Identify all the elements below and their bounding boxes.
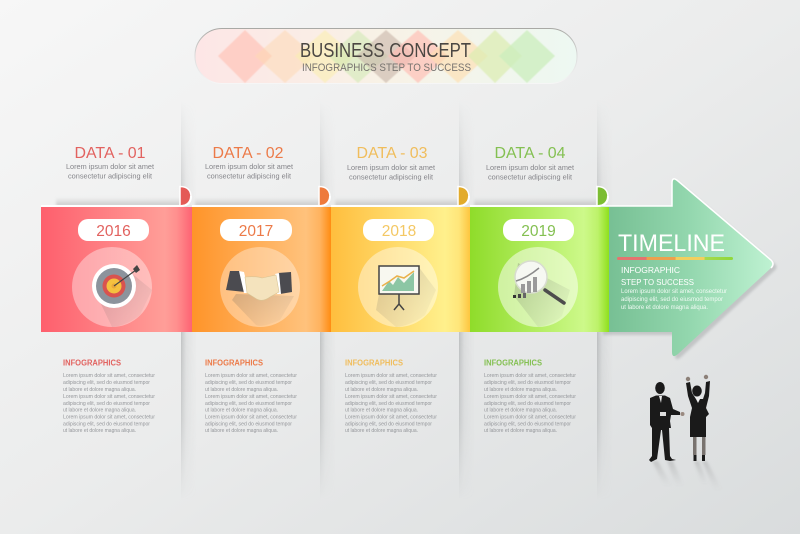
text block: infographics 4: Lorem ipsum dolor sit amet, consectetur [484, 414, 576, 420]
banner diamonds [218, 30, 555, 83]
text block: infographics 2 [205, 358, 297, 434]
business people silhouettes [649, 375, 722, 490]
text block: infographics 4: INFOGRAPHICS [484, 358, 543, 368]
year pill [78, 219, 149, 241]
text block: infographics 1: Lorem ipsum dolor sit amet, consectetur [63, 373, 155, 379]
icon: handshake [220, 247, 300, 327]
column heading: data 01: DATA - 01 [74, 145, 146, 162]
column heading: data 02: DATA - 02 [212, 145, 284, 162]
column heading: data 02: Lorem ipsum dolor sit amet [205, 162, 293, 171]
text block: infographics 3: ut labore et dolore magna aliqua. [345, 428, 418, 434]
text block: infographics 1: adipiscing elit, sed do eiusmod tempor [63, 401, 150, 407]
arrow: timeline [600, 179, 776, 359]
text block: infographics 4: ut labore et dolore magna aliqua. [484, 428, 557, 434]
column heading: data 04: DATA - 04 [494, 145, 566, 162]
text block: infographics 3: adipiscing elit, sed do eiusmod tempor [345, 422, 432, 428]
icon: target [72, 247, 152, 327]
text block: infographics 3: Lorem ipsum dolor sit amet, consectetur [345, 394, 437, 400]
text block: infographics 1: adipiscing elit, sed do eiusmod tempor [63, 380, 150, 386]
text block: infographics 3: adipiscing elit, sed do eiusmod tempor [345, 380, 432, 386]
year pill [220, 219, 292, 241]
text block: infographics 4: ut labore et dolore magna aliqua. [484, 408, 557, 414]
arrow title: TIMELINE [618, 230, 725, 257]
text block: infographics 4: Lorem ipsum dolor sit amet, consectetur [484, 394, 576, 400]
arrow body text: ut labore et dolore magna aliqua. [621, 304, 708, 311]
arrow body text [621, 288, 727, 311]
text block: infographics 3: ut labore et dolore magna aliqua. [345, 408, 418, 414]
banner subtitle: INFOGRAPHICS STEP TO SUCCESS [302, 62, 471, 74]
band 1: 2016 [41, 186, 192, 332]
text block: infographics 2: adipiscing elit, sed do eiusmod tempor [205, 401, 292, 407]
column heading: data 04: consectetur adipiscing elit [488, 172, 572, 182]
text block: infographics 1: INFOGRAPHICS [63, 358, 122, 368]
band 3: 2018: 2018 [382, 223, 416, 240]
rainbow rule [617, 257, 733, 260]
column heading: data 01: consectetur adipiscing elit [68, 172, 152, 180]
text block: infographics 4: adipiscing elit, sed do eiusmod tempor [484, 380, 571, 386]
floor reflections [652, 461, 722, 490]
text block: infographics 2: ut labore et dolore magna aliqua. [205, 428, 278, 434]
column heading: data 03: Lorem ipsum dolor sit amet [347, 163, 435, 172]
businesswoman [686, 375, 710, 461]
column heading: data 04 [486, 145, 574, 182]
year pill [363, 219, 434, 241]
text block: infographics 3: Lorem ipsum dolor sit amet, consectetur [345, 414, 437, 420]
column heading: data 02 [205, 145, 293, 180]
text block: infographics 2: adipiscing elit, sed do eiusmod tempor [205, 380, 292, 386]
text block: infographics 2: Lorem ipsum dolor sit amet, consectetur [205, 394, 297, 400]
band 1: 2016: 2016 [96, 223, 131, 240]
column heading: data 03: consectetur adipiscing elit [349, 172, 433, 182]
text block: infographics 1 [63, 358, 155, 434]
text block: infographics 3 [345, 358, 437, 434]
text block: infographics 1: Lorem ipsum dolor sit amet, consectetur [63, 394, 155, 400]
column heading: data 01: Lorem ipsum dolor sit amet [66, 162, 154, 171]
column heading: data 04: Lorem ipsum dolor sit amet [486, 163, 574, 172]
text block: infographics 2: Lorem ipsum dolor sit amet, consectetur [205, 414, 297, 420]
text block: infographics 1: ut labore et dolore magna aliqua. [63, 408, 136, 414]
text block: infographics 2: adipiscing elit, sed do eiusmod tempor [205, 422, 292, 428]
column heading: data 03: DATA - 03 [356, 145, 428, 162]
icon: presentation board [358, 247, 438, 327]
icon: magnifier on chart [498, 247, 578, 327]
text block: infographics 3: ut labore et dolore magna aliqua. [345, 387, 418, 393]
text block: infographics 4: Lorem ipsum dolor sit amet, consectetur [484, 373, 576, 379]
band 2: 2017: 2017 [239, 223, 273, 240]
text block: infographics 3: Lorem ipsum dolor sit amet, consectetur [345, 373, 437, 379]
text block: infographics 2: Lorem ipsum dolor sit amet, consectetur [205, 373, 297, 379]
shadows above bands [56, 197, 597, 206]
band 4: 2019: 2019 [521, 223, 556, 240]
banner title: BUSINESS CONCEPT [300, 40, 471, 62]
text block: infographics 1: ut labore et dolore magna aliqua. [63, 387, 136, 393]
text block: infographics 2: ut labore et dolore magna aliqua. [205, 408, 278, 414]
band 3: 2018 [331, 186, 470, 332]
text block: infographics 4: ut labore et dolore magna aliqua. [484, 387, 557, 393]
year pill [503, 219, 574, 241]
arrow body text: adipiscing elit, sed do eiusmod tempor [621, 296, 723, 303]
column shadows [181, 122, 605, 480]
column heading: data 02: consectetur adipiscing elit [207, 172, 291, 180]
text block: infographics 2: ut labore et dolore magna aliqua. [205, 387, 278, 393]
arrow body text: Lorem ipsum dolor sit amet, consectetur [621, 288, 727, 295]
text block: infographics 1: ut labore et dolore magna aliqua. [63, 428, 136, 434]
header banner [195, 28, 577, 84]
text block: infographics 3: INFOGRAPHICS [345, 358, 404, 368]
arrow: timeline: STEP TO SUCCESS [621, 277, 694, 287]
text block: infographics 4: adipiscing elit, sed do eiusmod tempor [484, 422, 571, 428]
businessman [649, 382, 684, 462]
text block: infographics 1: adipiscing elit, sed do eiusmod tempor [63, 422, 150, 428]
band 2: 2017 [192, 186, 331, 332]
arrow subtitle: INFOGRAPHIC [621, 265, 680, 275]
band 4: 2019 [470, 186, 609, 332]
text block: infographics 2: INFOGRAPHICS [205, 358, 264, 368]
text block: infographics 1: Lorem ipsum dolor sit amet, consectetur [63, 414, 155, 420]
text block: infographics 4: adipiscing elit, sed do eiusmod tempor [484, 401, 571, 407]
column heading: data 03 [347, 145, 435, 182]
column heading: data 01 [66, 145, 154, 180]
text block: infographics 4 [484, 358, 576, 434]
text block: infographics 3: adipiscing elit, sed do eiusmod tempor [345, 401, 432, 407]
